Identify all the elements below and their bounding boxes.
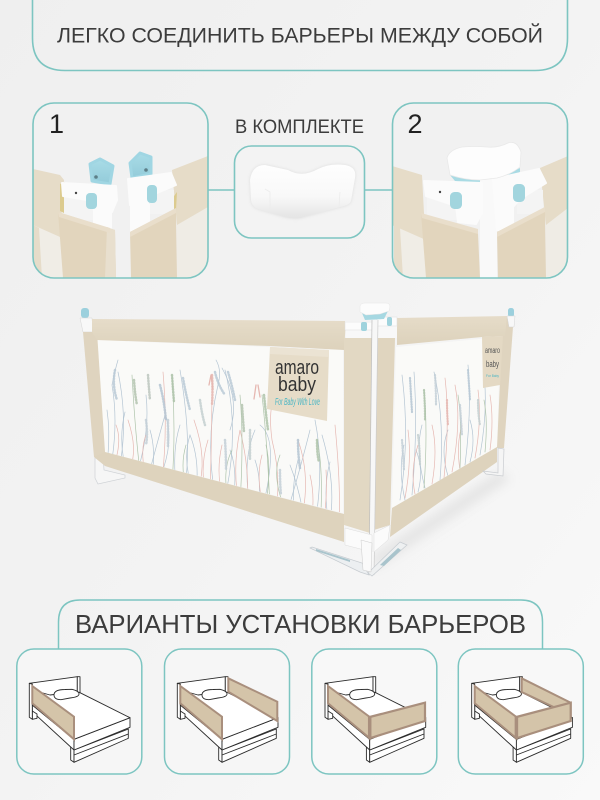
meadow print on left panel: [107, 360, 339, 530]
step 1 left teal cap: [90, 159, 113, 184]
step 1 right bracket: [128, 173, 176, 205]
step 2 right bracket: [493, 169, 546, 230]
right brand tag: For Baby: [486, 373, 499, 378]
barrier set: [475, 678, 571, 738]
centre pole: [369, 320, 378, 575]
right barrier white mesh panel: [392, 337, 500, 508]
title: ЛЕГКО СОЕДИНИТЬ БАРЬЕРЫ МЕЖДУ СОБОЙ: [57, 22, 543, 48]
left brand tag: baby: [278, 374, 316, 396]
soft floor shadow: [372, 470, 510, 570]
step 1 left bracket: [62, 183, 117, 212]
left feet and hardware: [80, 308, 125, 484]
left barrier white mesh panel: [97, 340, 343, 513]
left brand tag: [267, 347, 329, 421]
left brand tag: amaro: [275, 357, 319, 379]
right brand tag: baby: [486, 359, 499, 369]
card: two side barriers: [164, 649, 290, 774]
panel: included connector piece: [234, 146, 364, 238]
white cap installed: [447, 142, 521, 180]
top corner hardware: [345, 303, 515, 338]
step number 2: 2: [408, 109, 423, 139]
right brand tag: amaro: [485, 346, 500, 355]
meadow print on right panel: [400, 365, 492, 500]
bottom foot bracket: [310, 525, 407, 576]
right foot: [483, 448, 504, 476]
corner posts: [344, 337, 395, 533]
step number 1: 1: [49, 109, 64, 139]
barrier back: [228, 678, 277, 721]
card: one side barrier: [17, 649, 142, 774]
icon: white corner cap: [250, 164, 355, 218]
step 2 left bracket: [424, 181, 482, 224]
card: side and foot barriers: [312, 649, 437, 774]
label: included: В КОМПЛЕКТЕ: [235, 117, 364, 138]
barrier left: [32, 686, 74, 739]
product photo: corner bed barrier: [80, 303, 515, 576]
connector lines between step panels: [208, 189, 392, 191]
right brand tag: [482, 336, 503, 388]
heading: ВАРИАНТЫ УСТАНОВКИ БАРЬЕРОВ: [75, 611, 526, 639]
card: three barriers: [458, 649, 583, 774]
left brand tag: For Baby With Love: [275, 397, 320, 408]
barrier side and foot: [328, 686, 425, 738]
title box: [32, 0, 568, 70]
heading box: [58, 600, 542, 649]
left barrier fabric frame: [83, 319, 346, 542]
step 1 right teal cap: [130, 153, 151, 178]
panel: step 1: [33, 103, 208, 278]
panel: step 2: [392, 103, 568, 278]
right barrier fabric frame: [390, 316, 513, 537]
